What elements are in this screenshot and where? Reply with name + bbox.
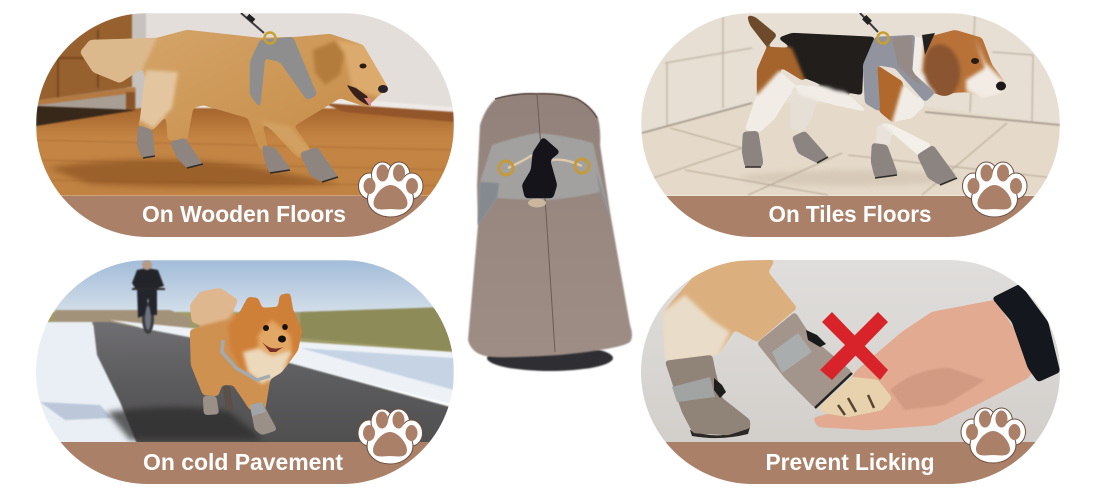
icon: paw: [358, 162, 423, 217]
boot body: [468, 93, 632, 357]
label: prevent licking: Prevent Licking: [766, 449, 934, 475]
eyelets: [499, 159, 589, 175]
panel: on cold pavement: [35, 260, 454, 484]
banner: [666, 442, 1036, 484]
cord toggle: [522, 137, 560, 198]
stitch line: [537, 95, 555, 352]
icon: red cross: [820, 312, 888, 380]
banner: [62, 196, 428, 237]
scene: snowy road: [35, 260, 454, 444]
dog face details: [347, 64, 388, 108]
scene: tiled room: [641, 13, 1060, 196]
cord ends: [528, 198, 546, 208]
label: on cold pavement: On cold Pavement: [143, 449, 343, 475]
panel: on tiles floors: [641, 13, 1060, 237]
dog boots: [742, 131, 957, 185]
product: dog boot: [468, 93, 632, 371]
icon: paw: [358, 409, 422, 464]
banner: [60, 442, 430, 484]
dog boots: [137, 125, 338, 182]
label: on wooden floors: On Wooden Floors: [142, 201, 346, 227]
dog: golden retriever: [80, 30, 388, 158]
pomeranian face and harness: [222, 324, 288, 380]
dog paw: [818, 377, 892, 417]
scene: studio background: [641, 260, 1060, 444]
harness and leash: [860, 13, 935, 112]
banner: [666, 196, 1034, 237]
cyclist: [132, 260, 165, 334]
icon: paw: [962, 162, 1027, 217]
worn boot on standing leg: [665, 355, 750, 438]
scene: wooden room: [36, 13, 454, 196]
raised boot: [757, 312, 852, 408]
drawcord: [508, 155, 582, 168]
dog: pomeranian: [190, 288, 302, 410]
panel: prevent licking: [641, 260, 1060, 484]
dog: beagle: [745, 15, 1007, 155]
harness and leash: [241, 13, 317, 108]
boot sole: [487, 345, 613, 371]
dog boots: [203, 385, 277, 435]
dog legs: [663, 260, 797, 360]
panel: on wooden floors: [36, 13, 454, 237]
icon: paw: [961, 408, 1026, 463]
beagle face details: [922, 33, 1006, 90]
hand and sleeve: [813, 284, 1060, 430]
label: on tiles floors: On Tiles Floors: [768, 201, 932, 227]
reflective band: [478, 133, 610, 225]
